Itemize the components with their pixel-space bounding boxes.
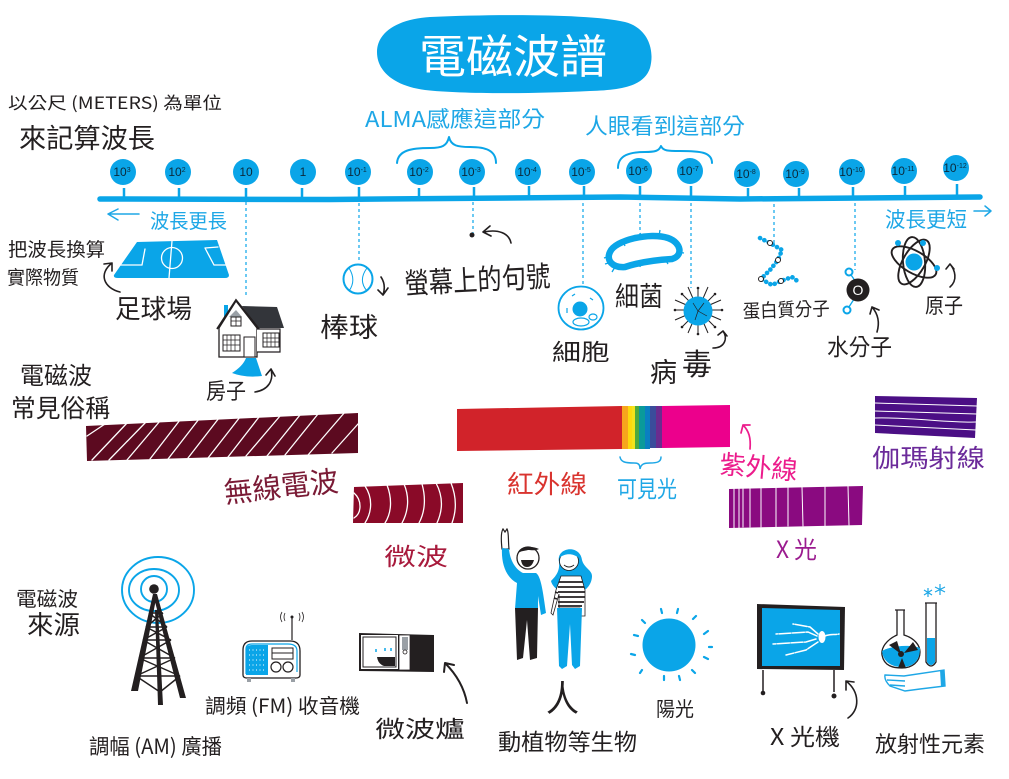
icon: sun — [631, 609, 712, 680]
scale markers: 3 — [127, 167, 131, 174]
text: convert to real objects — [7, 235, 105, 290]
arrow: x-ray machine — [846, 681, 857, 718]
label: protein: 蛋白質分子 — [742, 294, 830, 324]
label: football field: 足球場 — [115, 289, 192, 326]
label: FM radio: 調頻 (FM) 收音機 — [205, 690, 360, 719]
scale markers: 10 — [839, 165, 853, 179]
test tube — [925, 603, 937, 666]
arrow: longer wavelength: 波長更長 — [150, 205, 227, 234]
icon: cell — [558, 286, 604, 330]
flask — [882, 610, 920, 668]
text: convert to real objects: 把波長換算 — [8, 235, 105, 262]
icon: virus — [674, 287, 723, 335]
bar: gamma rays — [875, 396, 977, 438]
icon: football field — [114, 240, 229, 278]
scale markers: 10 — [679, 164, 693, 178]
icon: radio tower — [122, 557, 194, 705]
title: 電磁波譜 — [419, 21, 607, 87]
label: x-ray machine: X 光機 — [770, 718, 840, 752]
scale markers: -10 — [853, 167, 863, 174]
scale markers: 10 — [785, 167, 799, 181]
scale markers: 10 — [168, 165, 182, 179]
icon: water molecule: O — [853, 282, 864, 298]
scale markers: -1 — [361, 167, 367, 174]
label: ultraviolet: 紫外線 — [718, 444, 799, 488]
label: infrared: 紅外線 — [507, 465, 587, 501]
scale markers: -8 — [750, 169, 756, 176]
wavelength axis — [100, 155, 980, 200]
icon: microwave oven — [359, 633, 434, 672]
arrow: ultraviolet — [741, 425, 750, 449]
heading: common names: 常見俗稱 — [11, 389, 110, 425]
icon: period dot — [470, 232, 474, 238]
label: cell: 細胞 — [552, 333, 610, 367]
label: baseball: 棒球 — [320, 306, 378, 345]
heading: unit note: 來記算波長 — [19, 117, 155, 156]
arrow: water — [870, 307, 879, 332]
icon: FM radio — [243, 612, 304, 682]
arrow: atom — [946, 264, 955, 287]
scale markers: 10 — [517, 165, 531, 179]
scale markers: 10 — [943, 161, 957, 175]
label: radioactive elements: 放射性元素 — [875, 727, 985, 759]
arrow: field — [104, 263, 120, 292]
bar: microwave — [353, 483, 463, 523]
scale markers — [110, 155, 969, 187]
icon: baseball — [344, 264, 372, 294]
scale markers: 10 — [736, 167, 750, 181]
heading: unit note: 以公尺 (METERS) 為單位 — [8, 89, 222, 114]
label: visible light: 可見光 — [617, 470, 677, 504]
scale markers: 2 — [182, 167, 186, 174]
arrow: baseball — [378, 277, 388, 295]
label: people: 人 — [546, 670, 579, 722]
heading: unit note — [8, 89, 222, 156]
scale markers: 10 — [628, 164, 642, 178]
woman — [551, 549, 592, 669]
scale markers: -9 — [799, 169, 805, 176]
scale markers: -12 — [957, 163, 967, 170]
scale markers: 10 — [347, 165, 361, 179]
heading: sources — [16, 583, 80, 642]
label: x-rays: X 光 — [776, 530, 817, 565]
stars — [924, 584, 945, 597]
scale markers: 1 — [300, 165, 307, 179]
heading: sources: 電磁波 — [16, 583, 78, 612]
scale markers: -3 — [475, 167, 481, 174]
arrow: house — [255, 369, 275, 392]
label: visible range: 人眼看到這部分 — [585, 109, 745, 141]
text: convert to real objects: 實際物質 — [7, 263, 79, 290]
scale markers: -4 — [531, 167, 537, 174]
scale markers: 10 — [461, 165, 475, 179]
scale markers: -5 — [585, 167, 591, 174]
label: microwave: 微波 — [384, 537, 448, 572]
label: water molecule: 水分子 — [827, 328, 892, 362]
label: atom: 原子 — [925, 290, 963, 320]
bar: infrared, visible, ultraviolet — [457, 405, 730, 451]
scale markers: 10 — [571, 165, 585, 179]
scale markers: -2 — [423, 167, 429, 174]
label: microwave oven: 微波爐 — [375, 710, 465, 744]
label: ALMA range: ALMA感應這部分 — [365, 102, 545, 134]
scale markers: 10 — [892, 164, 905, 178]
brace: visible range — [618, 146, 712, 168]
heading: common names: 電磁波 — [20, 356, 92, 391]
label: house: 房子 — [206, 374, 246, 406]
brace: visible light — [620, 457, 661, 469]
label: screen period: 螢幕上的句號 — [403, 253, 551, 303]
arrow: shorter wavelength: 波長更短 — [885, 204, 967, 234]
arrow: microwave oven — [444, 663, 467, 703]
arrow: period — [483, 226, 511, 243]
bar: radio waves — [86, 412, 358, 461]
icon: atom — [887, 235, 941, 289]
icon: people — [501, 529, 592, 669]
label: AM broadcast: 調幅 (AM) 廣播 — [89, 731, 222, 761]
scale markers: 10 — [239, 165, 253, 179]
label: bacteria: 細菌 — [615, 275, 663, 314]
label: animals and plants: 動植物等生物 — [498, 723, 637, 757]
label: sunlight: 陽光 — [656, 693, 694, 722]
scale markers: -6 — [642, 166, 648, 173]
glove — [885, 670, 945, 691]
label: radio waves: 無線電波 — [222, 458, 340, 512]
icon: house — [217, 300, 284, 377]
icon: bacteria — [604, 230, 684, 272]
icon: water molecule — [844, 268, 870, 314]
label: virus: 毒 — [682, 340, 712, 384]
icon: x-ray machine — [757, 604, 845, 698]
scale markers: 10 — [409, 165, 423, 179]
icon: protein molecule — [758, 238, 800, 285]
scale markers: 10 — [113, 165, 127, 179]
scale markers: -7 — [693, 166, 699, 173]
bar: x-rays — [729, 486, 863, 528]
arrow: longer wavelength — [108, 205, 227, 234]
title — [377, 15, 652, 93]
label: gamma rays: 伽瑪射線 — [872, 439, 985, 475]
man — [501, 529, 546, 660]
scale markers: -11 — [905, 166, 915, 173]
label: virus: 病 — [650, 351, 677, 390]
heading: common names — [11, 356, 110, 425]
arrow: virus — [713, 331, 727, 348]
icon: radioactive lab — [882, 584, 945, 691]
label: virus — [650, 340, 712, 390]
brace: ALMA range — [397, 137, 496, 163]
heading: sources: 來源 — [27, 605, 80, 642]
